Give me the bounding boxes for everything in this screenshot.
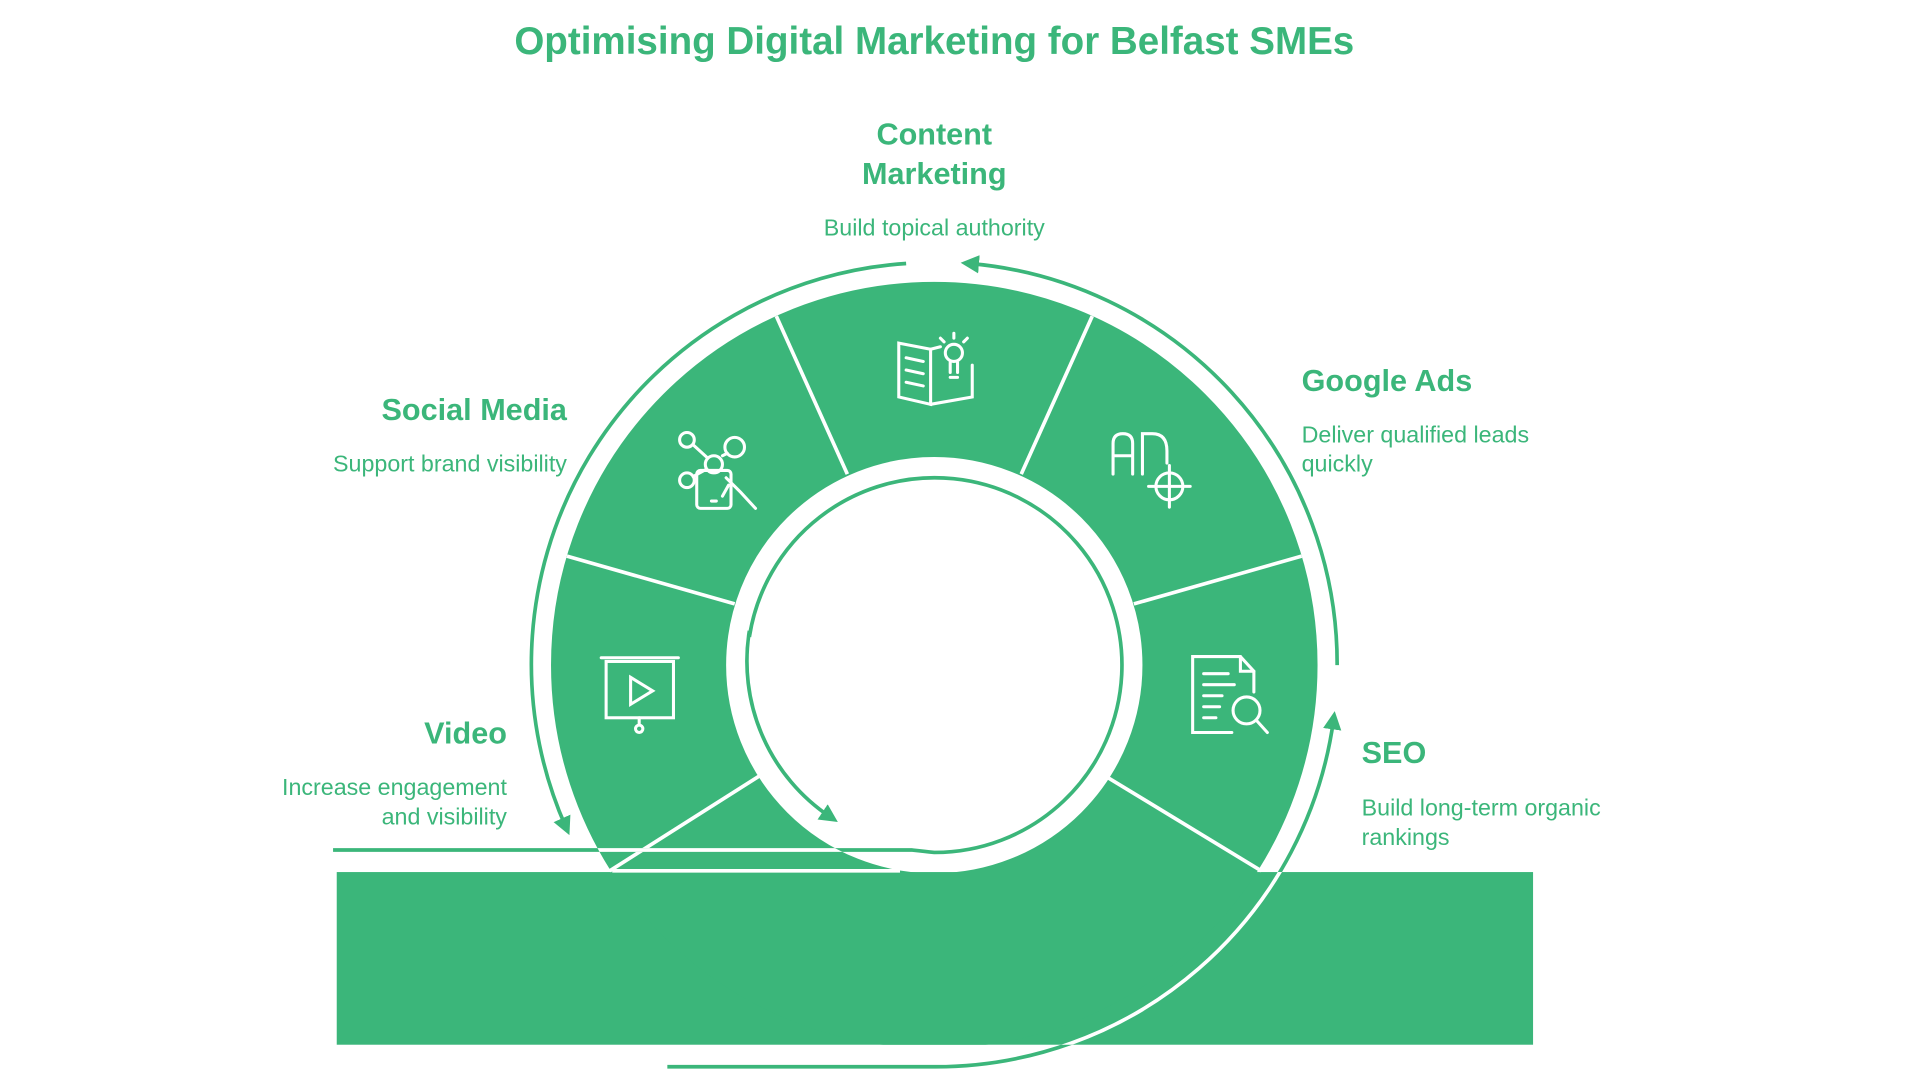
label: video: Increase engagement bbox=[282, 774, 507, 800]
label: video bbox=[282, 716, 507, 829]
label: seo: Build long-term organic bbox=[1362, 795, 1601, 821]
label: content marketing: Marketing bbox=[862, 157, 1007, 191]
label: content marketing bbox=[824, 118, 1045, 240]
label: content marketing: Content bbox=[876, 118, 992, 152]
label: google ads bbox=[1302, 364, 1529, 477]
label: google ads: quickly bbox=[1302, 451, 1373, 477]
arrow: right outer bbox=[970, 263, 1337, 665]
label: google ads: Google Ads bbox=[1302, 364, 1472, 398]
label: video: and visibility bbox=[382, 803, 507, 829]
arrow: bottom loop bbox=[667, 720, 1333, 1067]
label: seo: SEO bbox=[1362, 736, 1426, 770]
arrow: left outer bbox=[531, 263, 906, 827]
icon: content book bbox=[899, 333, 972, 404]
label: content marketing: Build topical authority bbox=[824, 214, 1045, 240]
label: social media: Social Media bbox=[382, 393, 568, 427]
icon: seo bbox=[1193, 657, 1267, 732]
icon: video bbox=[601, 658, 678, 732]
arrow: inner loop bbox=[747, 631, 830, 817]
label: social media: Support brand visibility bbox=[333, 451, 567, 477]
label: video: Video bbox=[424, 716, 507, 750]
label: google ads: Deliver qualified leads bbox=[1302, 421, 1529, 447]
icon: social network bbox=[680, 432, 756, 508]
ring diagram bbox=[333, 316, 1302, 961]
label: social media bbox=[333, 393, 568, 477]
title: Optimising Digital Marketing for Belfast SMEs bbox=[514, 20, 1354, 63]
base platform bbox=[337, 872, 1533, 1045]
label: seo: rankings bbox=[1362, 824, 1450, 850]
icon: google ads bbox=[1113, 434, 1190, 507]
label: seo bbox=[1362, 736, 1601, 850]
